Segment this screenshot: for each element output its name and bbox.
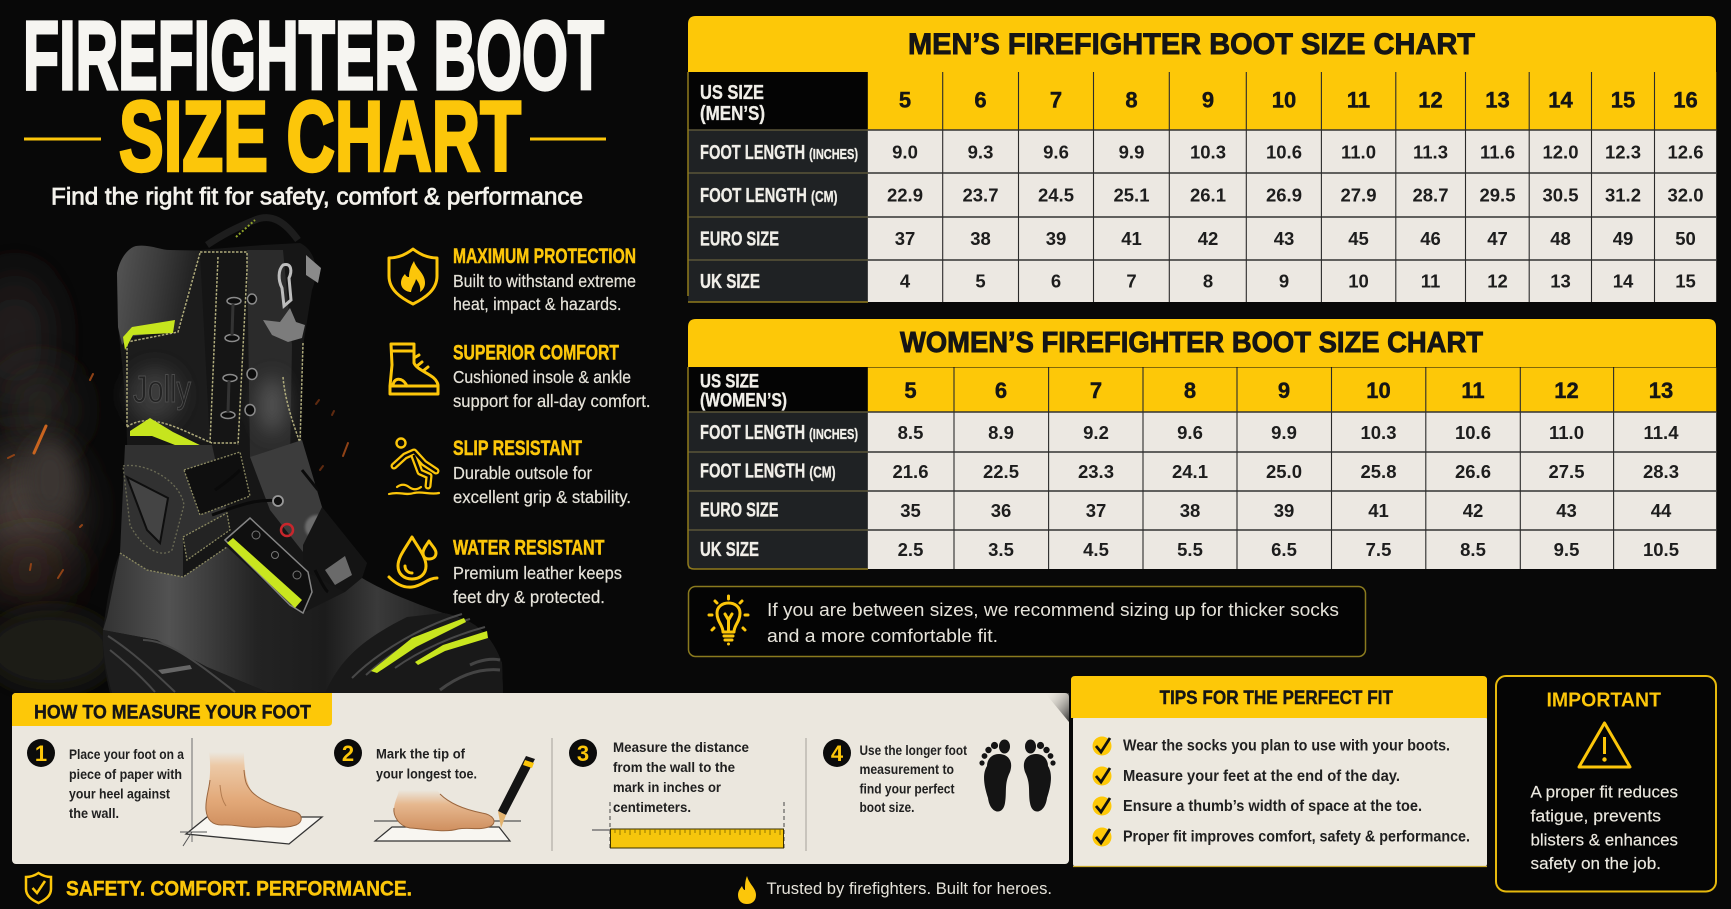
tips heading: [1071, 676, 1487, 718]
women's euro size: 43: [1556, 500, 1577, 521]
title line 2: SIZE CHART: [119, 80, 521, 192]
tip 4: Proper fit improves comfort, safety & performance.: [1123, 828, 1470, 846]
women's euro size: 42: [1463, 500, 1483, 521]
step 3: Measure the distance: [613, 740, 749, 755]
men's euro size: 46: [1420, 228, 1441, 249]
panel: important: fatigue, prevents: [1530, 806, 1661, 826]
ankle gray panel: [120, 445, 227, 577]
feature: maximum protection: MAXIMUM PROTECTION: [453, 245, 636, 268]
foot on paper illustration: [180, 752, 322, 846]
panel: how to measure your foot: [12, 693, 1069, 864]
men's UK size: 8: [1203, 270, 1213, 292]
icon: flame: [738, 876, 756, 904]
women's foot length inches: 10.6: [1455, 422, 1491, 443]
men's US sizes: 7: [1050, 88, 1062, 112]
step 3: mark in inches or: [613, 780, 722, 795]
feature: slip resistant: SLIP RESISTANT: [453, 437, 582, 460]
step 1: your heel against: [69, 786, 170, 802]
women's UK size: 8.5: [1460, 539, 1486, 560]
men's UK size: 10: [1348, 270, 1369, 292]
panel: important: A proper fit reduces: [1530, 782, 1678, 802]
footer: safety slogan: SAFETY. COMFORT. PERFORMANCE.: [66, 878, 412, 900]
women's foot length cm: 22.5: [983, 461, 1019, 482]
heading tab: [12, 693, 332, 726]
women's foot length cm: 21.6: [892, 461, 929, 482]
foot marking illustration: [374, 756, 535, 841]
step 4: Use the longer foot: [860, 743, 967, 758]
title: [23, 1, 606, 192]
women's US sizes: 9: [1278, 378, 1290, 403]
men's row labels: [700, 82, 858, 293]
men's row labels: FOOT LENGTH (CM): [700, 185, 838, 207]
front strip: [247, 250, 292, 460]
men's foot length inches: 9.6: [1043, 142, 1069, 162]
icon: water drops: [389, 537, 437, 587]
men's foot length inches: 9.0: [892, 142, 918, 162]
men's foot length inches: 11.0: [1341, 142, 1376, 162]
women's UK size: 3.5: [988, 539, 1014, 560]
men's US sizes: 16: [1673, 88, 1698, 112]
women's foot length inches: 8.9: [988, 422, 1014, 443]
step 2: [334, 739, 535, 841]
men's foot length cm: 25.1: [1113, 184, 1150, 206]
sole: [103, 630, 267, 693]
men's US sizes: 14: [1548, 88, 1573, 112]
eyelet and red ring: [273, 496, 293, 536]
women's US sizes: 5: [904, 378, 917, 403]
men's US sizes: 8: [1125, 88, 1138, 112]
men's foot length cm: 31.2: [1605, 184, 1641, 206]
women's row labels: (WOMEN’S): [700, 390, 787, 412]
men's heading: [688, 16, 1716, 72]
heel and foot leather: [103, 547, 503, 693]
women's foot length cm: 23.3: [1078, 461, 1114, 482]
step 2: Mark the tip of: [376, 746, 465, 762]
icon: warning triangle: [1579, 723, 1630, 767]
men's foot length inches: 10.6: [1266, 142, 1302, 162]
feature: superior comfort: Cushioned insole & ankle: [453, 367, 631, 387]
men's foot length cm: 27.9: [1340, 184, 1377, 206]
men's foot length cm: 29.5: [1479, 184, 1516, 206]
step 3: from the wall to the: [613, 760, 735, 775]
men's US sizes: 12: [1418, 88, 1443, 112]
women's US sizes: 7: [1090, 378, 1102, 403]
step 3: 3: [577, 741, 589, 766]
feature: maximum protection: heat, impact & hazards.: [453, 294, 622, 314]
footer: trusted by firefighters: [738, 876, 1052, 904]
men's UK size: 7: [1126, 270, 1137, 292]
men's foot length cm: 24.5: [1038, 184, 1074, 206]
men's US sizes: 5: [899, 88, 911, 112]
women's foot length cm: 26.6: [1455, 461, 1491, 482]
feature: superior comfort: support for all-day comfort.: [453, 391, 650, 411]
step 2: your longest toe.: [376, 766, 477, 782]
women's US sizes: 11: [1461, 378, 1485, 403]
step 1: [27, 739, 322, 846]
men's foot length cm: 30.5: [1542, 184, 1579, 206]
panel: important: blisters & enhances: [1530, 830, 1678, 850]
men's UK size: 11: [1421, 270, 1440, 292]
laces: [212, 470, 328, 592]
footer: trusted by firefighters: Trusted by firefighters. Built for heroes.: [766, 880, 1052, 898]
step 4: boot size.: [860, 800, 914, 815]
men's euro size: 49: [1613, 228, 1633, 249]
men's US sizes: 10: [1272, 88, 1296, 112]
stitching: [127, 252, 303, 445]
men's UK size: 14: [1613, 270, 1634, 292]
icon: shield with flame: [389, 249, 437, 304]
women's foot length inches: 9.9: [1271, 422, 1297, 443]
women's UK size: 6.5: [1271, 539, 1297, 560]
men's euro size: 47: [1487, 228, 1508, 249]
men's row labels: (MEN’S): [700, 103, 765, 125]
women's US sizes: 12: [1554, 378, 1579, 403]
men's UK size: 5: [975, 270, 986, 292]
women's euro size: 37: [1086, 500, 1106, 521]
panel: men's size chart: [688, 16, 1716, 302]
women's euro size: 38: [1180, 500, 1200, 521]
men's US sizes: 13: [1485, 88, 1510, 112]
men's US sizes: 15: [1611, 88, 1635, 112]
feature: slip resistant: excellent grip & stability.: [453, 487, 631, 507]
panel: important: [1496, 676, 1716, 892]
step 1: the wall.: [69, 806, 119, 821]
feature: superior comfort: SUPERIOR COMFORT: [453, 342, 619, 364]
feature: slip resistant: Durable outsole for: [453, 463, 592, 483]
men's US sizes: [899, 88, 1698, 112]
men's euro size: 48: [1550, 228, 1571, 249]
women's foot length inches: 11.0: [1549, 422, 1584, 443]
step 1: 1: [35, 741, 47, 766]
lace flap: [200, 252, 247, 445]
women's foot length cm: 25.0: [1266, 461, 1302, 482]
women's foot length cm: 28.3: [1643, 461, 1679, 482]
women's row labels: FOOT LENGTH (INCHES): [700, 422, 858, 444]
women's foot length inches: 9.2: [1083, 422, 1109, 443]
ruler illustration: [592, 802, 784, 851]
men's foot length cm: 23.7: [962, 184, 999, 206]
women's UK size: [898, 539, 1679, 560]
women's UK size: 9.5: [1554, 539, 1579, 560]
women's heading: [688, 319, 1716, 367]
women's row labels: FOOT LENGTH (CM): [700, 460, 836, 482]
lace box: [184, 452, 250, 515]
heading tab: HOW TO MEASURE YOUR FOOT: [34, 702, 311, 724]
tip 3: Ensure a thumb’s width of space at the toe.: [1123, 798, 1422, 815]
men's UK size: 9: [1279, 270, 1289, 292]
pull strap: [207, 218, 298, 245]
men's UK size: 13: [1550, 270, 1571, 292]
men's foot length inches: 11.3: [1413, 142, 1448, 162]
feature: water resistant: feet dry & protected.: [453, 587, 605, 607]
step 4: find your perfect: [860, 782, 955, 796]
men's foot length cm: 28.7: [1412, 184, 1449, 206]
step 4: measurement to: [860, 762, 954, 777]
women's euro size: [900, 500, 1672, 521]
icon: footprints: [979, 740, 1056, 812]
women's euro size: 35: [900, 500, 921, 521]
callout: sizing tip: and a more comfortable fit.: [767, 625, 998, 646]
lower lacing bits: [303, 507, 367, 592]
men's foot length inches: 12.0: [1542, 142, 1579, 162]
women's foot length inches: 10.3: [1360, 422, 1397, 443]
men's euro size: 38: [970, 228, 991, 249]
icon: slipping figure: [389, 438, 439, 494]
step 4: 4: [831, 741, 844, 766]
men's US sizes: 9: [1202, 88, 1214, 112]
women's US sizes: 6: [995, 378, 1007, 403]
men's foot length inches: 12.3: [1605, 142, 1641, 162]
step 1: piece of paper with: [69, 767, 182, 782]
women's US sizes: 10: [1366, 378, 1391, 403]
men's euro size: 43: [1274, 228, 1294, 249]
men's euro size: [895, 228, 1696, 249]
men's UK size: 15: [1675, 270, 1696, 292]
feature: maximum protection: Built to withstand extreme: [453, 271, 636, 291]
women's foot length inches: 9.6: [1177, 422, 1203, 443]
women's UK size: 10.5: [1643, 539, 1679, 560]
women's euro size: 36: [991, 500, 1011, 521]
women's row labels: US SIZE: [700, 372, 759, 392]
women's US sizes: 13: [1649, 378, 1673, 403]
men's row labels: FOOT LENGTH (INCHES): [700, 142, 858, 164]
women's euro size: 39: [1274, 500, 1294, 521]
women's foot length inches: 11.4: [1644, 422, 1679, 443]
title line 1: FIREFIGHTER BOOT: [23, 1, 604, 110]
women's foot length inches: 8.5: [898, 422, 923, 443]
feature: slip resistant: [389, 437, 631, 507]
women's row labels: EURO SIZE: [700, 500, 778, 522]
step 4: [823, 739, 1056, 815]
men's heading: MEN’S FIREFIGHTER BOOT SIZE CHART: [908, 28, 1475, 61]
men's row labels: US SIZE: [700, 82, 764, 104]
men's UK size: 4: [900, 270, 911, 292]
eyelets: [221, 294, 257, 418]
men's foot length inches: 9.3: [968, 142, 993, 162]
men's euro size: 41: [1121, 228, 1142, 249]
step 1: Place your foot on a: [69, 747, 184, 762]
men's euro size: 39: [1046, 228, 1066, 249]
women's UK size: 2.5: [898, 539, 923, 560]
neon reflective strips upper: [123, 320, 175, 350]
toe cap: [325, 613, 503, 693]
brand emboss: Jolly: [133, 369, 191, 411]
footer: safety slogan: [26, 873, 412, 903]
panel: tips for the perfect fit: [1071, 676, 1487, 867]
tip 2: Measure your feet at the end of the day.: [1123, 768, 1400, 785]
men's US sizes: 6: [974, 88, 987, 112]
men's euro size: 37: [895, 228, 915, 249]
men's row labels: EURO SIZE: [700, 228, 779, 250]
ankle pocket: [127, 477, 168, 543]
women's foot length inches: [898, 422, 1679, 443]
feature: maximum protection: [389, 245, 636, 314]
step 2: 2: [342, 741, 354, 766]
women's US sizes: [904, 378, 1673, 403]
women's foot length cm: 24.1: [1172, 461, 1208, 482]
women's foot length cm: [892, 461, 1679, 482]
women's UK size: 7.5: [1366, 539, 1391, 560]
men's row labels: UK SIZE: [700, 271, 760, 293]
feature: water resistant: [389, 536, 622, 607]
men's UK size: 6: [1051, 270, 1061, 292]
pencil: [498, 756, 535, 828]
panel: important: IMPORTANT: [1546, 690, 1661, 712]
men's foot length cm: 22.9: [887, 184, 923, 206]
shaft lower panel: [127, 255, 212, 443]
feature: superior comfort: [390, 342, 650, 411]
callout: sizing tip: [688, 586, 1366, 656]
men's UK size: 12: [1487, 270, 1508, 292]
step 3: centimeters.: [613, 800, 691, 815]
tips heading: TIPS FOR THE PERFECT FIT: [1160, 688, 1393, 709]
women's euro size: 41: [1368, 500, 1389, 521]
women's foot length cm: 25.8: [1360, 461, 1397, 482]
women's heading: WOMEN’S FIREFIGHTER BOOT SIZE CHART: [900, 327, 1483, 359]
smoke and embers: [0, 270, 348, 690]
subtitle: Find the right fit for safety, comfort & performance: [51, 184, 583, 210]
women's UK size: 4.5: [1083, 539, 1109, 560]
hook and wing nut: [263, 255, 321, 342]
women's euro size: 44: [1651, 500, 1672, 521]
boot illustration: [103, 218, 503, 693]
ankle strap: [183, 513, 230, 560]
feature: water resistant: Premium leather keeps: [453, 563, 622, 583]
women's row labels: UK SIZE: [700, 539, 759, 561]
men's euro size: 42: [1198, 228, 1218, 249]
icon: check shield: [26, 873, 51, 903]
men's foot length cm: 26.9: [1266, 184, 1302, 206]
men's foot length inches: 9.9: [1119, 142, 1144, 162]
men's UK size: [900, 270, 1696, 292]
women's row labels: [700, 372, 858, 561]
men's foot length inches: [892, 142, 1704, 162]
men's foot length cm: [887, 184, 1704, 206]
panel: women's size chart: [688, 319, 1716, 569]
feature: water resistant: WATER RESISTANT: [453, 536, 605, 560]
icon: boot: [390, 344, 438, 394]
tip 1: Wear the socks you plan to use with your boots.: [1123, 738, 1450, 754]
men's foot length inches: 11.6: [1480, 142, 1515, 162]
icon: light bulb: [709, 596, 748, 644]
panel: important: safety on the job.: [1530, 854, 1661, 873]
men's euro size: 50: [1675, 228, 1696, 249]
ankle strap with neon: [225, 518, 312, 613]
boot silhouette: [103, 243, 503, 693]
women's foot length cm: 27.5: [1548, 461, 1585, 482]
lower front strip: [250, 440, 330, 552]
women's UK size: 5.5: [1177, 539, 1203, 560]
men's foot length cm: 26.1: [1190, 184, 1226, 206]
callout: sizing tip: If you are between sizes, we recommend sizing up for thicker socks: [767, 599, 1339, 620]
men's euro size: 45: [1348, 228, 1369, 249]
men's US sizes: 11: [1347, 88, 1370, 112]
women's US sizes: 8: [1184, 378, 1196, 403]
collar leather: [117, 246, 200, 345]
men's foot length cm: 32.0: [1667, 184, 1704, 206]
step 3: [569, 739, 784, 851]
men's foot length inches: 10.3: [1190, 142, 1226, 162]
men's foot length inches: 12.6: [1667, 142, 1704, 162]
